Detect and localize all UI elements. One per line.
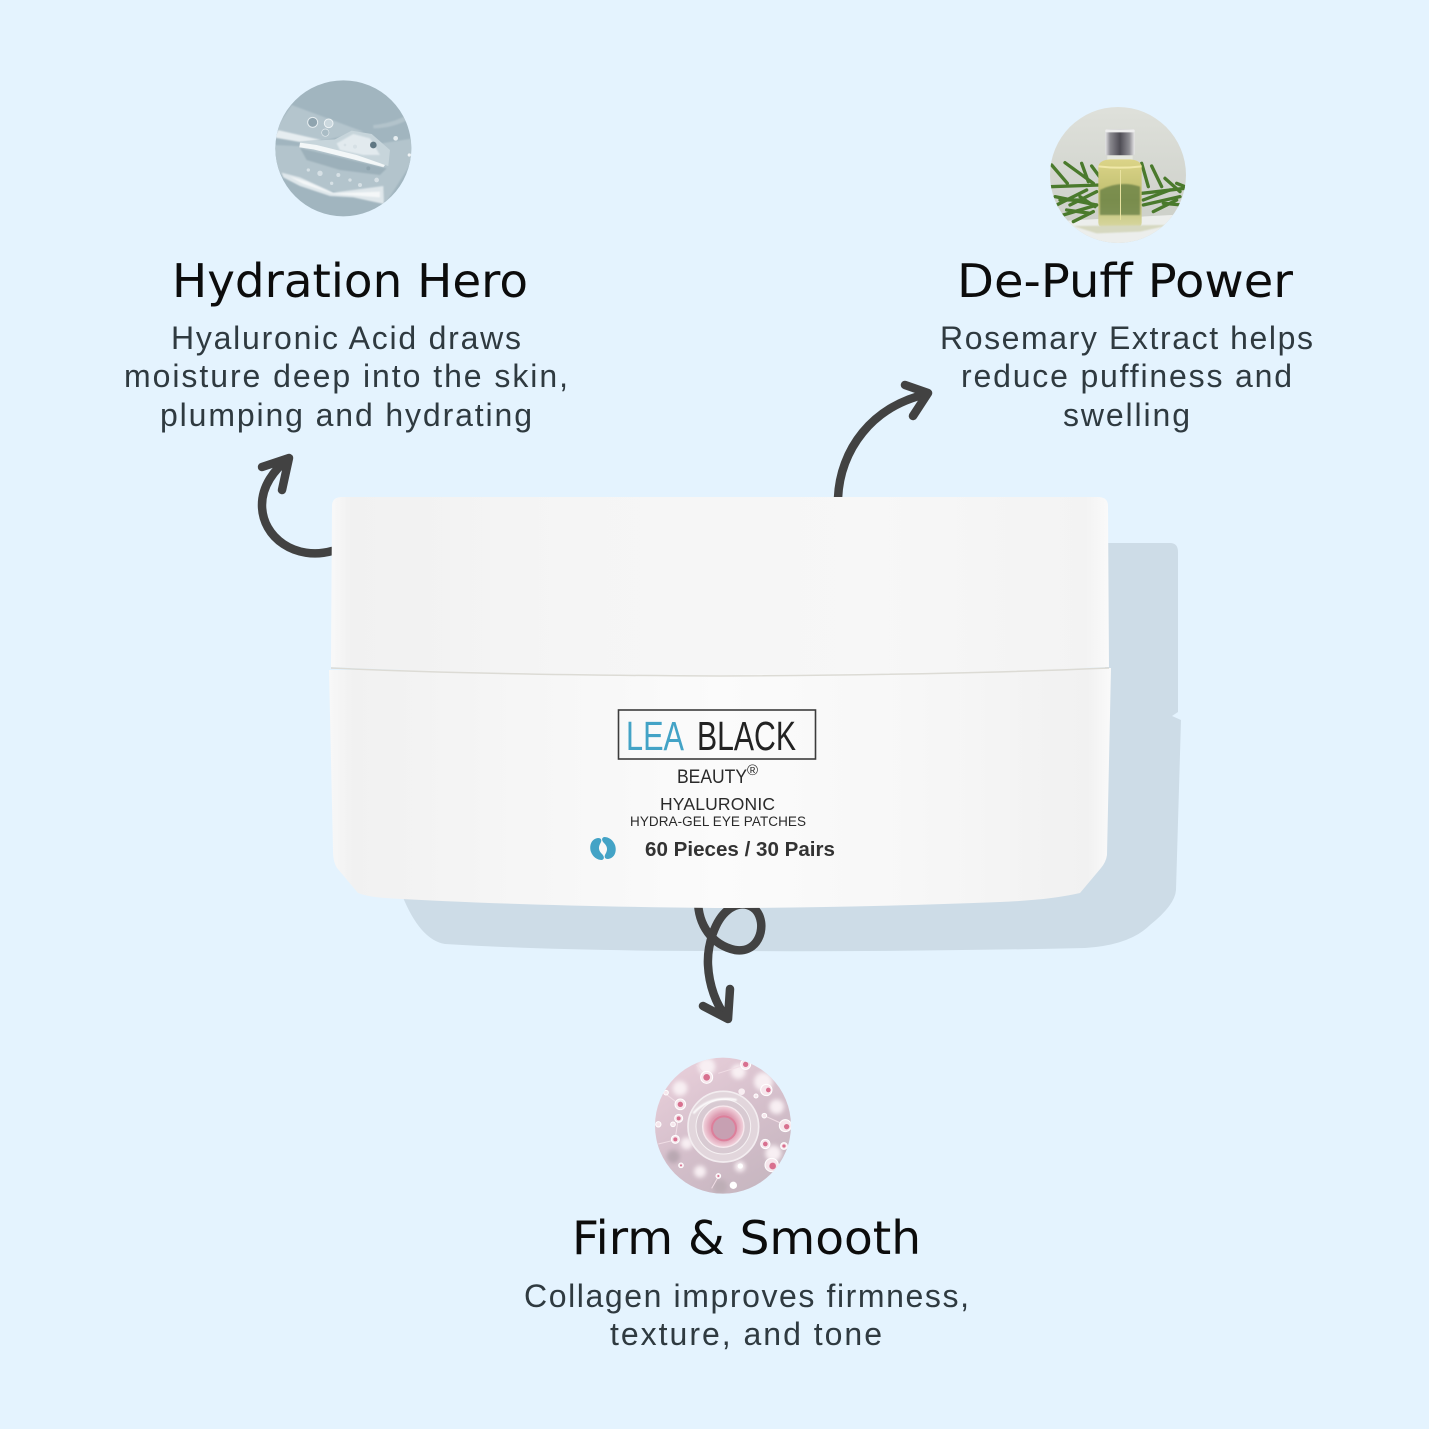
jar label: LEA [626, 713, 684, 759]
text: hydration description: plumping and hydrating [160, 397, 532, 433]
product jar [329, 497, 1111, 908]
text: hydration description: moisture deep into the skin, [124, 358, 568, 394]
icon: collagen molecule photo [653, 1057, 793, 1197]
jar base [329, 668, 1111, 908]
icon: eye patch logo [590, 837, 616, 860]
text: hydration description: Hyaluronic Acid draws [171, 320, 521, 356]
arrow: loop to firm and smooth [698, 900, 761, 1019]
heading: Hydration Hero: Hydration Hero [172, 254, 528, 308]
text: de-puff description: Rosemary Extract helps [940, 320, 1313, 356]
text: firm and smooth description: Collagen improves firmness, [524, 1278, 969, 1314]
jar label: BLACK [697, 713, 796, 759]
jar label: HYDRA-GEL EYE PATCHES [630, 814, 806, 829]
text: de-puff description: reduce puffiness and [961, 358, 1292, 394]
arrow: to de-puff power [838, 385, 928, 498]
jar label: BEAUTY [677, 767, 747, 788]
text: hydration description [124, 320, 568, 433]
text: de-puff description: swelling [1063, 397, 1190, 433]
jar shadow [402, 543, 1181, 951]
heading: Firm & Smooth: Firm & Smooth [572, 1211, 921, 1265]
arrow: to hydration hero [262, 458, 332, 553]
jar label: 60 Pieces / 30 Pairs [645, 838, 835, 861]
icon: hyaluronic gel photo [273, 80, 413, 217]
icon: rosemary oil photo [1047, 103, 1190, 247]
jar label: ® [747, 762, 758, 779]
text: firm and smooth description: texture, and tone [610, 1316, 882, 1352]
text: firm and smooth description [524, 1278, 969, 1352]
jar label [590, 710, 835, 861]
jar label: HYALURONIC [660, 794, 775, 814]
jar lid [331, 497, 1109, 675]
heading: De-Puff Power: De-Puff Power [957, 254, 1293, 308]
text: de-puff description [940, 320, 1313, 433]
